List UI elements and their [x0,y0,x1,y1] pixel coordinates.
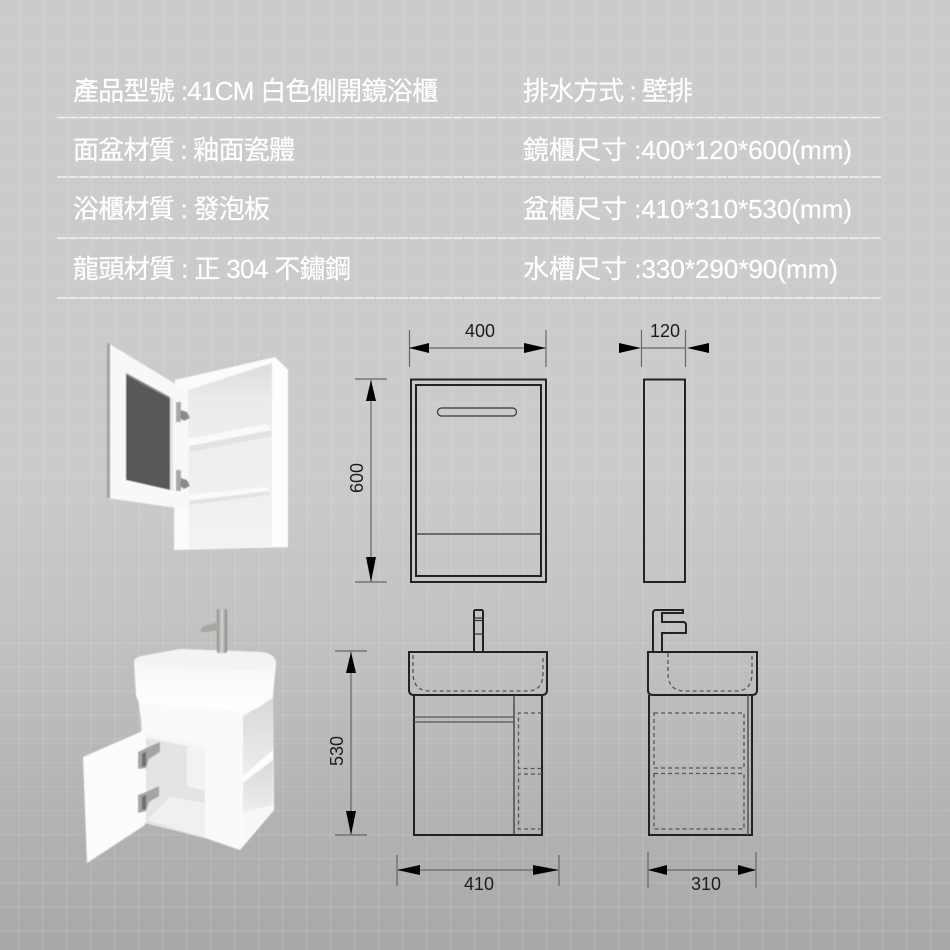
icon: chrome faucet [201,609,227,653]
dimension: mirror height 600: 600 [347,463,367,493]
icon: upper door hinge [138,742,160,769]
spec: faucet material: 龍頭材質 : 正 304 不鏽鋼 [73,254,351,284]
icon: lower door hinge [138,786,159,813]
dimension: vanity height 530: 530 [327,736,347,766]
spec: drainage method: 排水方式 : 壁排 [523,76,693,106]
spec: basin material: 面盆材質 : 釉面瓷體 [73,135,295,165]
spec: product model: 產品型號 :41CM 白色側開鏡浴櫃 [73,76,438,106]
spec list: product details [73,76,852,284]
dimension: vanity depth 310: 310 [691,874,721,894]
diagram: vanity side view [648,610,757,835]
photo: open mirror cabinet [107,343,288,550]
spec: mirror cabinet size: 鏡櫃尺寸 :400*120*600(mm) [523,135,852,165]
icon: faucet front [474,610,483,652]
diagram: mirror cabinet front view [411,380,546,582]
dimension: mirror height 600 [347,379,387,582]
spec: cabinet material: 浴櫃材質 : 發泡板 [73,194,270,224]
dimension: mirror width 400 [409,321,546,367]
dimension: mirror depth 120: 120 [650,321,680,341]
spec: sink size: 水槽尺寸 :330*290*90(mm) [523,254,838,284]
dimension: mirror depth 120 [619,321,709,367]
spec: basin cabinet size: 盆櫃尺寸 :410*310*530(mm) [523,194,852,224]
photo: vanity cabinet with open door [83,609,276,863]
icon: faucet side [653,610,686,652]
dimension: vanity width 410: 410 [464,874,494,894]
dimension: mirror width 400: 400 [465,321,495,341]
diagram: vanity front view [409,610,547,835]
dimension: vanity width 410 [397,855,559,894]
dimension: vanity height 530 [327,651,367,835]
diagram: mirror cabinet side view [644,380,685,582]
dimension: vanity depth 310 [648,852,756,894]
